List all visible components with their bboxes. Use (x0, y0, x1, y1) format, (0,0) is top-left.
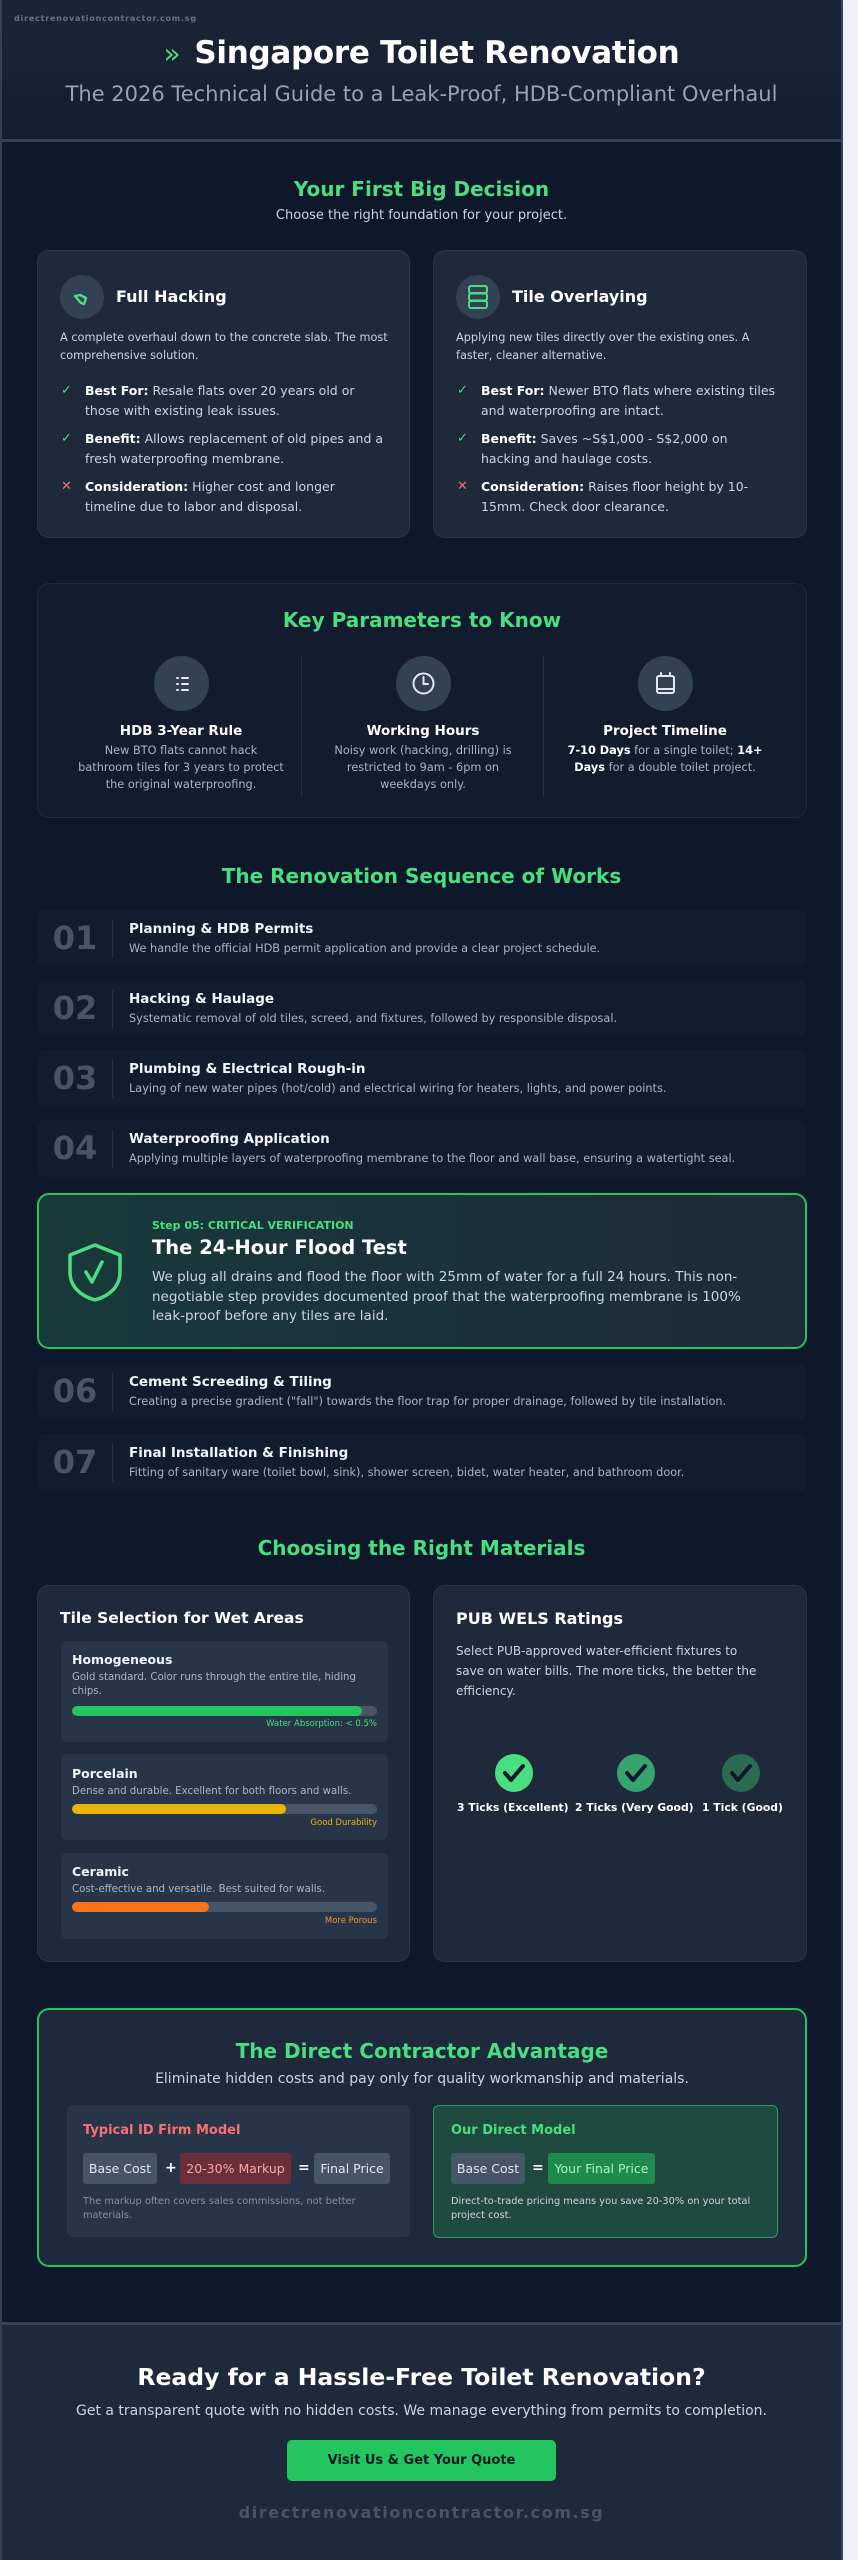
card title: Full Hacking (116, 287, 227, 306)
section heading: sequence: The Renovation Sequence of Works (222, 864, 621, 888)
param: HDB rule: bathroom tiles for 3 years to protect (78, 761, 284, 774)
panel: PUB WELS (433, 1585, 807, 1962)
step 07: Final Installation & Finishing (129, 1445, 348, 1461)
pricing formula: typical: = (298, 2160, 310, 2176)
list: Best For: Resale flats over 20 years old or (85, 383, 354, 398)
tick ratings: 1 Tick (Good) (702, 1801, 783, 1814)
tick ratings: 3 Ticks (Excellent) (457, 1801, 569, 1814)
icon: list (154, 656, 208, 711)
step 01: 01 (53, 919, 97, 957)
tile: porcelain: Porcelain (72, 1766, 138, 1781)
description: comprehensive solution. (60, 349, 198, 362)
step label: Step 05: CRITICAL VERIFICATION (152, 1219, 354, 1232)
step 01: Planning & HDB Permits (129, 921, 313, 937)
tile: ceramic: Cost-effective and versatile. Best suited for walls. (72, 1884, 325, 1895)
list: Consideration: Raises floor height by 10- (481, 479, 748, 494)
list: those with existing leak issues. (85, 403, 280, 418)
list: timeline due to labor and disposal. (85, 499, 302, 514)
param: HDB rule: HDB 3-Year Rule (120, 723, 242, 739)
step 03: Plumbing & Electrical Rough-in (129, 1061, 366, 1077)
step 03: 03 (53, 1059, 97, 1097)
list: and waterproofing are intact. (481, 403, 664, 418)
header (2, 0, 841, 142)
param: working hours (334, 656, 512, 791)
tile: homogeneous: Water Absorption: < 0.5% (266, 1719, 377, 1729)
section heading: first decision (276, 177, 567, 223)
tick ratings (457, 1754, 783, 1814)
icon: shield (68, 1243, 122, 1302)
param: working hours: Working Hours (367, 723, 479, 739)
param: timeline: 7-10 Days for a single toilet; 14+ (568, 744, 762, 757)
subheading: Eliminate hidden costs and pay only for quality workmanship and materials. (155, 2071, 689, 2087)
step 06: Cement Screeding & Tiling (129, 1374, 332, 1390)
param: timeline (568, 656, 762, 774)
step 04: Waterproofing Application (129, 1131, 330, 1147)
description: Select PUB-approved water-efficient fixtures to (456, 1644, 737, 1658)
pricing formula: typical: Final Price (320, 2161, 384, 2176)
heading: The Direct Contractor Advantage (236, 2039, 608, 2063)
tile: porcelain: Good Durability (310, 1818, 377, 1828)
pricing formula: typical (83, 2153, 390, 2184)
pricing formula: typical: 20-30% Markup (186, 2161, 285, 2176)
button (287, 2440, 556, 2481)
CTA heading: Ready for a Hassle-Free Toilet Renovation? (137, 2363, 706, 2391)
panel: tile overlaying: ✓ (457, 383, 468, 398)
button: Visit Us & Get Your Quote (328, 2453, 515, 2468)
panel title: PUB WELS Ratings (456, 1609, 623, 1628)
list (457, 383, 775, 514)
panel: tile overlaying (433, 250, 807, 538)
pricing formula: typical: + (165, 2160, 177, 2176)
param: working hours: weekdays only. (380, 778, 466, 791)
box: our direct model: project cost. (451, 2210, 512, 2221)
list: Consideration: Higher cost and longer (85, 479, 335, 494)
param: timeline: Project Timeline (603, 723, 727, 739)
step 04: Applying multiple layers of waterproofing membrane to the floor and wall base, ensuring a watertight seal. (129, 1152, 735, 1165)
icon: calendar (638, 656, 692, 711)
tile: homogeneous: Homogeneous (72, 1652, 172, 1667)
param: HDB rule: New BTO flats cannot hack (105, 744, 257, 757)
list: fresh waterproofing membrane. (85, 451, 284, 466)
panel title: Tile Selection for Wet Areas (60, 1609, 304, 1627)
step 03: Laying of new water pipes (hot/cold) and electrical wiring for heaters, lights, and power points. (129, 1082, 666, 1095)
panel: tile overlaying: ✕ (457, 479, 468, 494)
step 07: Fitting of sanitary ware (toilet bowl, sink), shower screen, bidet, water heater, and bathroom door. (129, 1466, 684, 1479)
flood description: negotiable step provides documented proof that the waterproofing membrane is 100% (152, 1288, 741, 1304)
section heading: materials: Choosing the Right Materials (258, 1536, 585, 1560)
panel: full hacking: ✓ (61, 431, 72, 446)
description: faster, cleaner alternative. (456, 349, 606, 362)
panel: full hacking: ✓ (61, 383, 72, 398)
icon: clock (396, 656, 450, 711)
subtitle: The 2026 Technical Guide to a Leak-Proof, HDB-Compliant Overhaul (66, 82, 777, 106)
tile: homogeneous (61, 1641, 388, 1742)
box: typical ID model: The markup often covers sales commissions, not better (83, 2196, 356, 2207)
card title: Tile Overlaying (512, 287, 648, 306)
param: HDB rule (78, 656, 284, 791)
box: our direct model: Direct-to-trade pricing means you save 20-30% on your total (451, 2196, 750, 2207)
flood title: The 24-Hour Flood Test (152, 1236, 407, 1259)
panel: tile selection (37, 1585, 410, 1962)
step 02: Hacking & Haulage (129, 991, 274, 1007)
description (456, 1644, 756, 1698)
panel: key parameters (37, 583, 807, 818)
flood description: We plug all drains and flood the floor with 25mm of water for a full 24 hours. This non- (152, 1269, 737, 1285)
icon: 2 ticks (617, 1754, 655, 1792)
flood description (152, 1269, 741, 1324)
step 01 (37, 910, 807, 967)
box: typical ID model: materials. (83, 2210, 132, 2221)
footer CTA (2, 2322, 841, 2560)
description (60, 331, 388, 362)
step 01: We handle the official HDB permit application and provide a clear project schedule. (129, 942, 600, 955)
icon: 3 ticks (495, 1754, 533, 1792)
pricing formula: direct: Your Final Price (555, 2161, 648, 2176)
param: HDB rule: the original waterproofing. (106, 778, 256, 791)
tile: homogeneous: Gold standard. Color runs through the entire tile, hiding (72, 1672, 356, 1683)
pricing formula: typical: Base Cost (89, 2161, 151, 2176)
step 02: Systematic removal of old tiles, screed, and fixtures, followed by responsible disposal. (129, 1012, 617, 1025)
pricing formula: direct (451, 2153, 655, 2184)
tile: homogeneous: chips. (72, 1686, 102, 1697)
footer domain: directrenovationcontractor.com.sg (239, 2503, 604, 2522)
icon: tiles (456, 275, 500, 319)
box: typical ID model: Typical ID Firm Model (83, 2123, 240, 2138)
tile: porcelain (61, 1754, 388, 1840)
step 04: 04 (53, 1129, 97, 1167)
panel: direct contractor advantage (37, 2008, 807, 2267)
panel: full hacking: ✕ (61, 479, 72, 494)
callout: flood test (37, 1193, 807, 1349)
param: working hours: restricted to 9am - 6pm on (347, 761, 499, 774)
tick ratings: 2 Ticks (Very Good) (575, 1801, 694, 1814)
CTA text: Get a transparent quote with no hidden costs. We manage everything from permits to completion. (76, 2403, 767, 2419)
step 03 (37, 1050, 807, 1107)
heading: Key Parameters to Know (283, 608, 561, 632)
pricing formula: direct: = (532, 2160, 544, 2176)
description: Applying new tiles directly over the existing ones. A (456, 331, 749, 344)
tile: ceramic: Ceramic (72, 1864, 129, 1879)
list: 15mm. Check door clearance. (481, 499, 669, 514)
list: Best For: Newer BTO flats where existing tiles (481, 383, 775, 398)
step 06 (37, 1363, 807, 1420)
description: efficiency. (456, 1684, 516, 1698)
tile: ceramic (61, 1853, 388, 1939)
tile: ceramic: More Porous (325, 1916, 377, 1926)
description: save on water bills. The more ticks, the better the (456, 1664, 756, 1678)
param: working hours: Noisy work (hacking, drilling) is (334, 744, 512, 757)
main title: » Singapore Toilet Renovation (164, 35, 679, 71)
step 02: 02 (53, 989, 97, 1027)
list: Benefit: Saves ~S$1,000 - S$2,000 on (481, 431, 728, 446)
list: Benefit: Allows replacement of old pipes and a (85, 431, 383, 446)
step 07: 07 (53, 1443, 97, 1481)
icon: hacking (60, 275, 104, 319)
panel: full hacking (37, 250, 410, 538)
box: our direct model (433, 2105, 778, 2238)
header domain: directrenovationcontractor.com.sg (14, 14, 197, 23)
pricing formula: direct: Base Cost (457, 2161, 519, 2176)
box: typical ID model (67, 2105, 410, 2237)
param: timeline: Days for a double toilet project. (574, 761, 756, 774)
description (456, 331, 750, 362)
list (61, 383, 383, 514)
list: hacking and haulage costs. (481, 451, 652, 466)
description: A complete overhaul down to the concrete slab. The most (60, 331, 388, 344)
step 07 (37, 1434, 807, 1491)
step 04 (37, 1120, 807, 1177)
tile: porcelain: Dense and durable. Excellent for both floors and walls. (72, 1786, 351, 1797)
panel: tile overlaying: ✓ (457, 431, 468, 446)
box: our direct model: Our Direct Model (451, 2123, 576, 2138)
flood description: leak-proof before any tiles are laid. (152, 1308, 388, 1324)
step 06: Creating a precise gradient ("fall") towards the floor trap for proper drainage, followed by tile installation. (129, 1395, 726, 1408)
icon: 1 tick (722, 1754, 760, 1792)
step 06: 06 (53, 1372, 97, 1410)
section heading: first decision: Your First Big Decision (294, 177, 549, 201)
section heading: first decision: Choose the right foundation for your project. (276, 208, 567, 223)
step 02 (37, 980, 807, 1037)
